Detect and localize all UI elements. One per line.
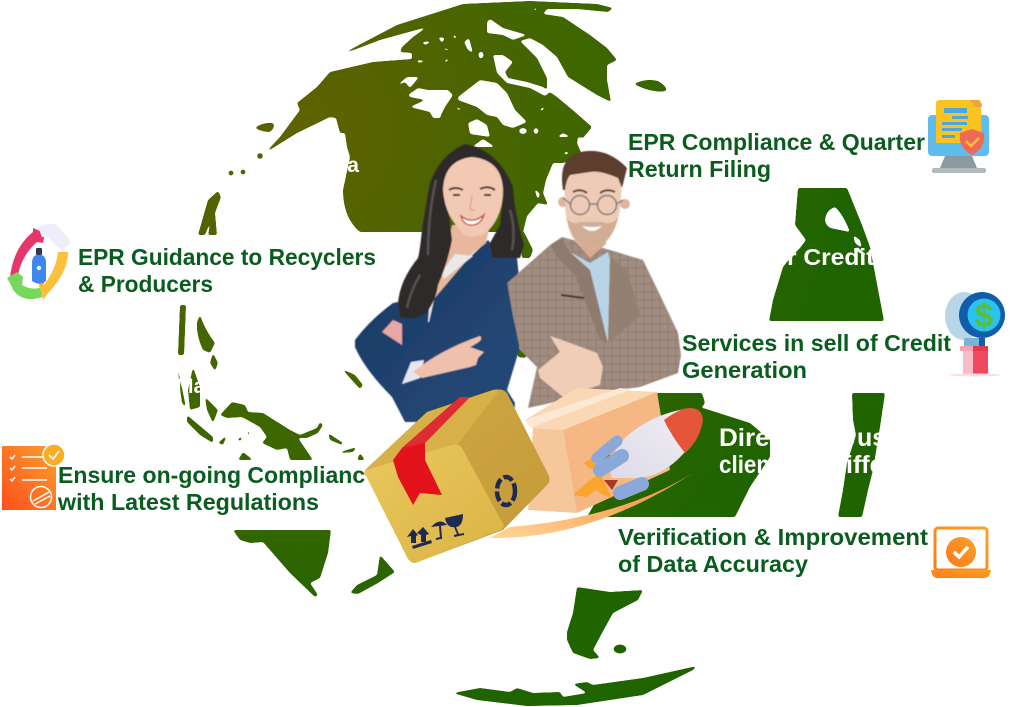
crossed hand xyxy=(413,336,484,378)
label: EPR guidance: EPR Guidance to Recyclers xyxy=(78,244,376,270)
icon: laptop with check xyxy=(931,528,991,578)
shirt strip xyxy=(428,296,434,322)
label: services in sell of credit: Generation xyxy=(682,357,807,383)
obscured white label: direct discussion: Direct Disc xyxy=(719,424,855,452)
man xyxy=(507,151,681,408)
obscured white label: top left: India xyxy=(310,154,359,177)
africa upper right xyxy=(769,188,884,321)
peach carton xyxy=(525,388,670,513)
chest and neck xyxy=(433,225,490,300)
iceland island xyxy=(634,80,666,92)
stubble xyxy=(567,218,618,248)
obscured white label: direct discussion: clients for d xyxy=(719,451,846,479)
label: EPR compliance xyxy=(628,129,925,182)
label: EPR compliance: EPR Compliance & Quarter xyxy=(628,129,925,155)
north america and greenland xyxy=(265,1,617,232)
label: services in sell of credit: Services in sell of Credit xyxy=(682,330,951,356)
label: EPR compliance: Return Filing xyxy=(628,156,771,182)
jacket xyxy=(507,237,681,408)
red ribbon xyxy=(393,397,470,505)
obscured white label: direct discussion: ifferent xyxy=(846,451,931,479)
icon: monitor with document and shield xyxy=(928,100,989,173)
obscured white label: left: Make in xyxy=(176,375,253,398)
antarctica xyxy=(453,666,697,706)
rocket xyxy=(573,408,703,498)
africa middle right xyxy=(587,393,770,517)
label: on-going compliance xyxy=(57,462,378,515)
right lapel xyxy=(608,258,640,343)
front face xyxy=(364,444,504,562)
recycle icon xyxy=(497,477,515,505)
face xyxy=(565,170,621,248)
label: on-going compliance: Ensure on-going Compliance xyxy=(58,462,378,488)
globe map background xyxy=(177,1,885,706)
handling symbols xyxy=(407,514,464,549)
cuff xyxy=(402,360,424,384)
ears xyxy=(558,197,568,207)
icon: dollar magnifier xyxy=(945,292,1005,376)
neck xyxy=(573,225,606,258)
hair xyxy=(562,151,627,190)
hand xyxy=(538,336,603,397)
label: EPR guidance: & Producers xyxy=(78,271,213,297)
swoosh xyxy=(490,473,693,538)
alaska islands xyxy=(255,123,274,132)
icon: orange checklist xyxy=(2,444,65,510)
face xyxy=(443,157,503,237)
obscured white label: credit: r Credits xyxy=(787,244,888,270)
label: EPR guidance xyxy=(78,244,376,297)
shirt xyxy=(562,237,610,343)
left lapel xyxy=(550,238,608,343)
glasses xyxy=(563,196,623,214)
hair highlights xyxy=(407,180,514,308)
label: verification: Verification & Improvement xyxy=(618,524,928,550)
central america fragments xyxy=(178,305,186,355)
icon: dollar magnifier: $ xyxy=(975,297,993,334)
icon: recycling loop with bottle xyxy=(7,224,71,300)
top face xyxy=(365,390,498,470)
far left fragment xyxy=(198,191,221,235)
woman xyxy=(355,144,524,422)
hair xyxy=(398,144,524,319)
shirt collar xyxy=(441,254,473,279)
label: services in sell of credit xyxy=(682,330,951,383)
obscured white label: direct discussion: ussion xyxy=(857,424,938,452)
label: verification xyxy=(618,524,928,577)
mexico sliver behind people xyxy=(519,232,533,258)
south america lower left xyxy=(233,530,331,597)
jacket xyxy=(355,240,521,422)
obscured white label: direct discussion xyxy=(719,424,938,479)
yellow parcel box xyxy=(364,389,550,563)
southern tip xyxy=(567,587,643,659)
label: verification: of Data Accuracy xyxy=(618,551,808,577)
pocket xyxy=(561,295,584,298)
label: on-going compliance: with Latest Regulations xyxy=(57,489,319,515)
